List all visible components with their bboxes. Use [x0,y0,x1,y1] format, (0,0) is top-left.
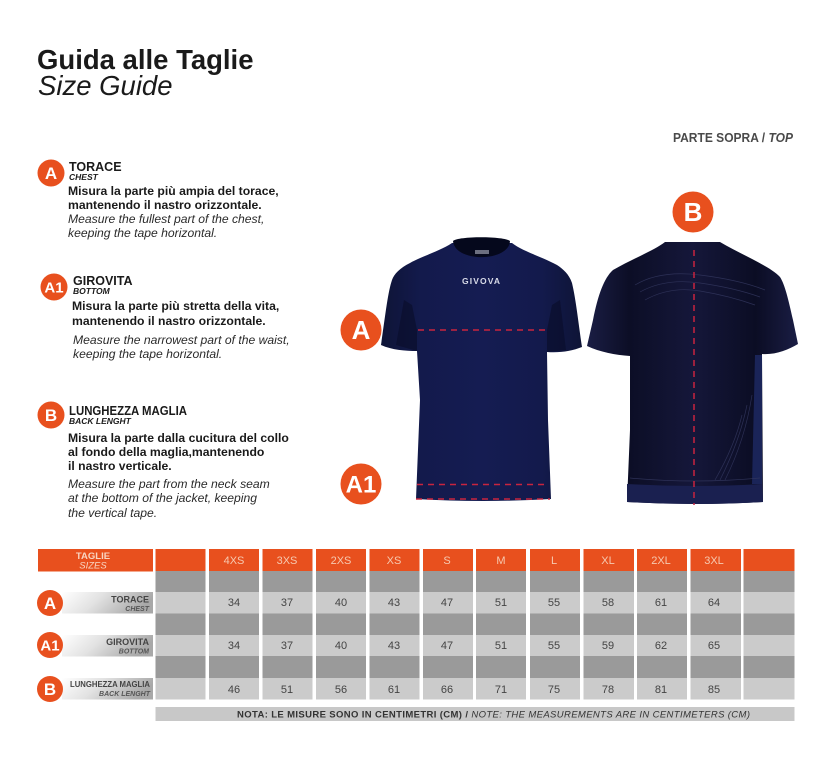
table header label: SIZES [79,560,107,572]
icon: marker A: A [352,315,371,345]
row label: chest: A [44,594,56,613]
icon: marker B: B [684,197,702,227]
column: S: 66 [441,684,453,696]
column: S: 47 [441,597,453,609]
back length description [68,431,289,520]
chest description: Measure the fullest part of the chest, [68,212,264,226]
icon: badge B [38,402,64,428]
icon: badge A [38,160,64,186]
column: 4XS [209,549,259,700]
waist description: keeping the tape horizontal. [73,347,222,361]
column: S: S [443,555,451,567]
note [156,707,794,721]
chest description: Misura la parte più ampia del torace, [68,184,279,198]
icon: badge A1: A1 [44,280,64,296]
size table [37,549,794,702]
column: XS [370,549,420,700]
table header label: TAGLIE [76,551,110,562]
icon: badge A1 [40,274,68,300]
title [37,44,254,101]
waist description: Measure the narrowest part of the waist, [73,333,290,347]
column: 3XS: 51 [281,684,293,696]
chest heading: CHEST [69,172,99,182]
table header label [38,549,153,572]
column: 4XS: 4XS [224,555,244,567]
chest description: mantenendo il nastro orizzontale. [68,198,262,212]
row label: waist: BOTTOM [119,648,149,656]
column: 2XS: 40 [335,640,347,652]
column: XS: 61 [388,684,400,696]
column: M: M [496,555,506,567]
waist heading [73,274,132,296]
column: 2XL: 61 [655,597,667,609]
column: XL: 59 [602,640,614,652]
chest measuring line [418,329,546,331]
row label: back length: LUNGHEZZA MAGLIA [70,679,150,689]
column: M [476,549,526,700]
column: 2XS: 40 [335,597,347,609]
side panel [752,355,762,484]
icon: badge B: B [45,406,57,425]
column: M: 51 [495,597,507,609]
column: 3XL: 65 [708,640,720,652]
chest description: keeping the tape horizontal. [68,226,217,240]
row label: back length: B [44,680,56,699]
row label: back length [37,676,153,702]
column: 3XL [690,549,741,700]
waist heading: BOTTOM [73,286,111,296]
waist heading: GIROVITA [73,274,132,288]
back length heading [69,404,187,426]
column: 4XS: 34 [228,640,240,652]
column: 3XL: 64 [708,597,720,609]
text block: back length [38,402,289,520]
column: 2XS: 56 [335,684,347,696]
back length description: il nastro verticale. [68,459,172,473]
column: L: 55 [548,640,560,652]
back measuring line [693,250,695,505]
back shirt [587,242,798,505]
column: S: 47 [441,640,453,652]
icon: marker A [340,310,382,350]
title: Size Guide [38,70,173,101]
column: 2XL: 62 [655,640,667,652]
text block: waist [40,274,290,361]
back length heading: BACK LENGHT [69,416,132,426]
column: M: 71 [495,684,507,696]
column: 3XS: 37 [281,640,293,652]
column: 2XL [637,549,687,700]
pattern [630,274,765,481]
neck [453,237,510,257]
column: 2XL: 81 [655,684,667,696]
logo: GIVOVA [462,276,500,286]
column: 2XS [316,549,366,700]
column: XS: 43 [388,597,400,609]
column: XS: 43 [388,640,400,652]
section label: top: PARTE SOPRA / TOP [673,131,794,145]
column: XS: XS [387,555,401,567]
waist measuring lines [416,484,550,499]
column: 3XL: 85 [708,684,720,696]
waist description: Misura la parte più stretta della vita, [72,299,279,313]
chest description [68,184,279,240]
column: 3XS: 37 [281,597,293,609]
waist description: mantenendo il nastro orizzontale. [72,314,266,328]
front shirt [381,237,582,501]
icon: marker A1: A1 [346,472,376,498]
column: 2XS: 2XS [331,555,351,567]
row label: chest [37,590,153,616]
back length description: al fondo della maglia,mantenendo [68,445,264,459]
title: Guida alle Taglie [37,44,254,75]
column: 3XL: 3XL [704,555,724,567]
column: 3XS: 3XS [277,555,297,567]
column: L: 75 [548,684,560,696]
column: S [423,549,473,700]
sleeve shading [396,300,417,351]
hem band [627,484,763,504]
column: 2XL: 2XL [651,555,671,567]
back length description: Misura la parte dalla cucitura del collo [68,431,289,445]
icon: badge A: A [45,164,57,183]
chest heading: TORACE [69,160,122,174]
back length description: Measure the part from the neck seam [68,477,270,491]
row label: waist: GIROVITA [106,637,149,647]
row label: back length: BACK LENGHT [99,691,151,698]
back length heading: LUNGHEZZA MAGLIA [69,404,187,418]
column: L [530,549,580,700]
row label: waist [37,632,153,658]
row label: chest: TORACE [111,594,149,604]
row label: waist: A1 [40,638,60,654]
column: 4XS: 46 [228,684,240,696]
column: 3XS [262,549,312,700]
column: XL: 58 [602,597,614,609]
column: M: 51 [495,640,507,652]
column: blank right [744,549,794,700]
text block: chest [38,160,279,240]
chest heading [69,160,122,182]
column: L: 55 [548,597,560,609]
back length description: at the bottom of the jacket, keeping [68,491,257,505]
waist description [72,299,290,361]
column: XL: 78 [602,684,614,696]
column: 4XS: 34 [228,597,240,609]
note: NOTA: LE MISURE SONO IN CENTIMETRI (CM) / NOTE: THE MEASUREMENTS ARE IN CENTIMETERS (CM) [237,710,750,720]
column: XL [584,549,634,700]
column: blank [156,549,206,700]
icon: marker A1 [340,464,382,504]
row label: chest: CHEST [125,606,150,613]
icon: marker B [672,192,714,232]
column: L: L [551,555,557,567]
back length description: the vertical tape. [68,506,157,520]
column: XL: XL [601,555,615,567]
